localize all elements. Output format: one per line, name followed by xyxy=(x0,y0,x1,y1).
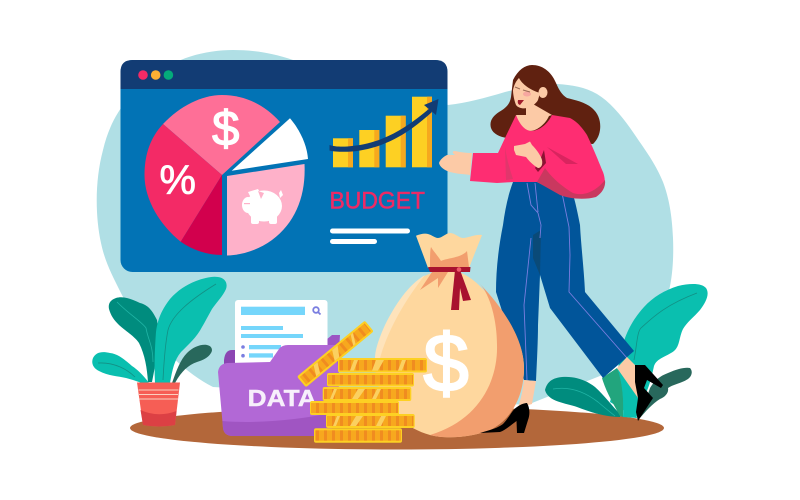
icon: piggy bank xyxy=(242,189,283,224)
bag shade xyxy=(430,284,524,437)
text lines xyxy=(330,228,410,244)
data folder xyxy=(218,300,340,436)
background blob xyxy=(97,50,673,405)
leaf: dark green small xyxy=(172,345,212,383)
dollar sign: $ xyxy=(212,102,239,156)
coin row 6 xyxy=(314,428,402,443)
hair xyxy=(490,65,600,144)
bag neck xyxy=(416,233,482,268)
leaf: dark teal xyxy=(109,297,158,382)
front shoe xyxy=(480,380,536,433)
bag dollar sign: $ xyxy=(423,318,469,409)
flower pot xyxy=(137,382,180,426)
slice: dark xyxy=(181,175,222,255)
right plant xyxy=(545,284,708,418)
left potted plant xyxy=(92,277,227,426)
money bag xyxy=(375,233,524,437)
leaf: teal inner xyxy=(617,368,637,418)
bag highlight xyxy=(375,275,425,358)
leaf: green xyxy=(602,368,623,417)
bag tie xyxy=(428,267,471,310)
hand on chest xyxy=(514,142,542,168)
tilted coin roll xyxy=(297,321,374,387)
back foot and shoe xyxy=(617,357,663,421)
coin row 2 xyxy=(327,373,414,386)
coin row 3 xyxy=(323,387,411,401)
coin row 5 xyxy=(326,414,415,428)
folder back xyxy=(224,350,240,370)
leaf: large teal xyxy=(610,284,708,418)
window body xyxy=(120,60,448,272)
slice: percent xyxy=(144,124,222,242)
percent sign: % xyxy=(159,157,196,203)
pie chart xyxy=(144,95,308,256)
window header xyxy=(120,60,448,89)
bar chart xyxy=(330,97,438,167)
window dots xyxy=(138,70,173,80)
outstretched hand xyxy=(439,151,472,175)
leaf: large teal xyxy=(155,277,227,383)
cheek and mouth xyxy=(523,92,531,96)
woman figure xyxy=(439,65,663,421)
leaf: dark green xyxy=(640,368,692,418)
leaf: low teal xyxy=(545,377,621,417)
arrow: growth xyxy=(330,99,438,152)
leaf: low teal xyxy=(92,352,150,385)
heading: budget: BUDGET xyxy=(330,188,425,215)
paper sheet xyxy=(235,300,328,370)
pants xyxy=(496,182,634,381)
coin row 1 xyxy=(338,358,427,372)
blouse shadow xyxy=(537,168,605,199)
neck and face xyxy=(513,78,552,131)
browser window panel xyxy=(120,60,448,272)
slice: dollar xyxy=(163,95,280,175)
bag body xyxy=(375,270,524,437)
folder front xyxy=(218,345,340,436)
folder bottom shade xyxy=(222,412,335,436)
ground ellipse xyxy=(130,406,664,450)
icon: search xyxy=(313,307,320,314)
pink blouse xyxy=(470,115,605,199)
coin stacks xyxy=(297,321,427,443)
slice: white xyxy=(232,118,308,171)
coin row 4 xyxy=(310,401,399,415)
folder label: DATA xyxy=(248,385,317,411)
slice: piggy xyxy=(227,164,305,256)
